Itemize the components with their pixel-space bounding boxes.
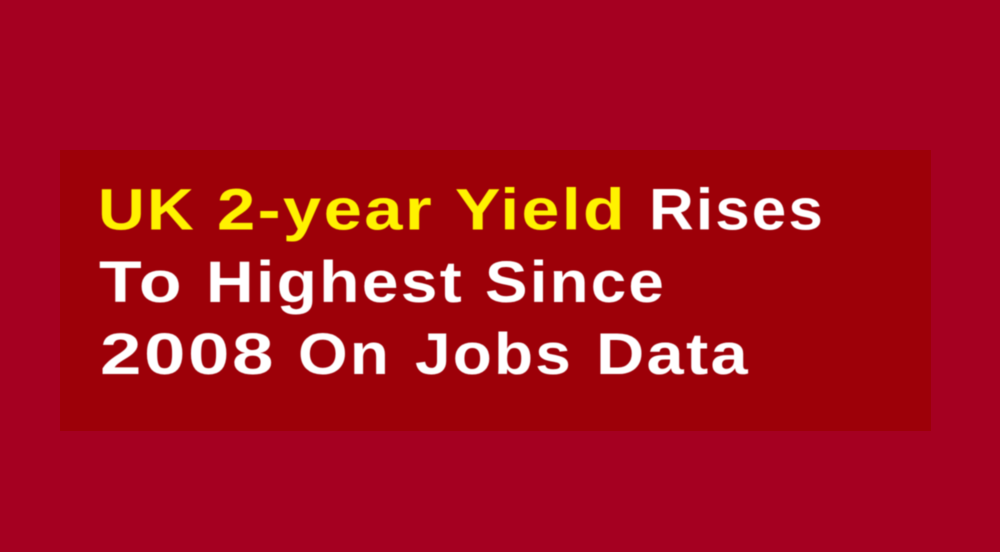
heading line 1: Yield — [455, 178, 627, 242]
heading line 3: On — [298, 322, 391, 387]
heading line 3: Data — [596, 322, 750, 387]
heading line 2: Highest — [206, 250, 464, 315]
heading line 2: Since — [485, 250, 666, 315]
panel: headline background — [60, 150, 931, 431]
heading line 3: 2008 — [100, 322, 276, 387]
heading line 1: Rises — [649, 178, 825, 242]
heading line 1 — [98, 178, 825, 242]
heading line 1: UK — [98, 178, 196, 242]
heading line 3: Jobs — [415, 322, 573, 387]
heading line 2 — [99, 250, 666, 315]
heading line 1: 2-year — [217, 178, 434, 242]
heading line 3 — [100, 322, 750, 387]
heading line 2: To — [99, 250, 184, 315]
heading: headline text — [98, 178, 825, 387]
